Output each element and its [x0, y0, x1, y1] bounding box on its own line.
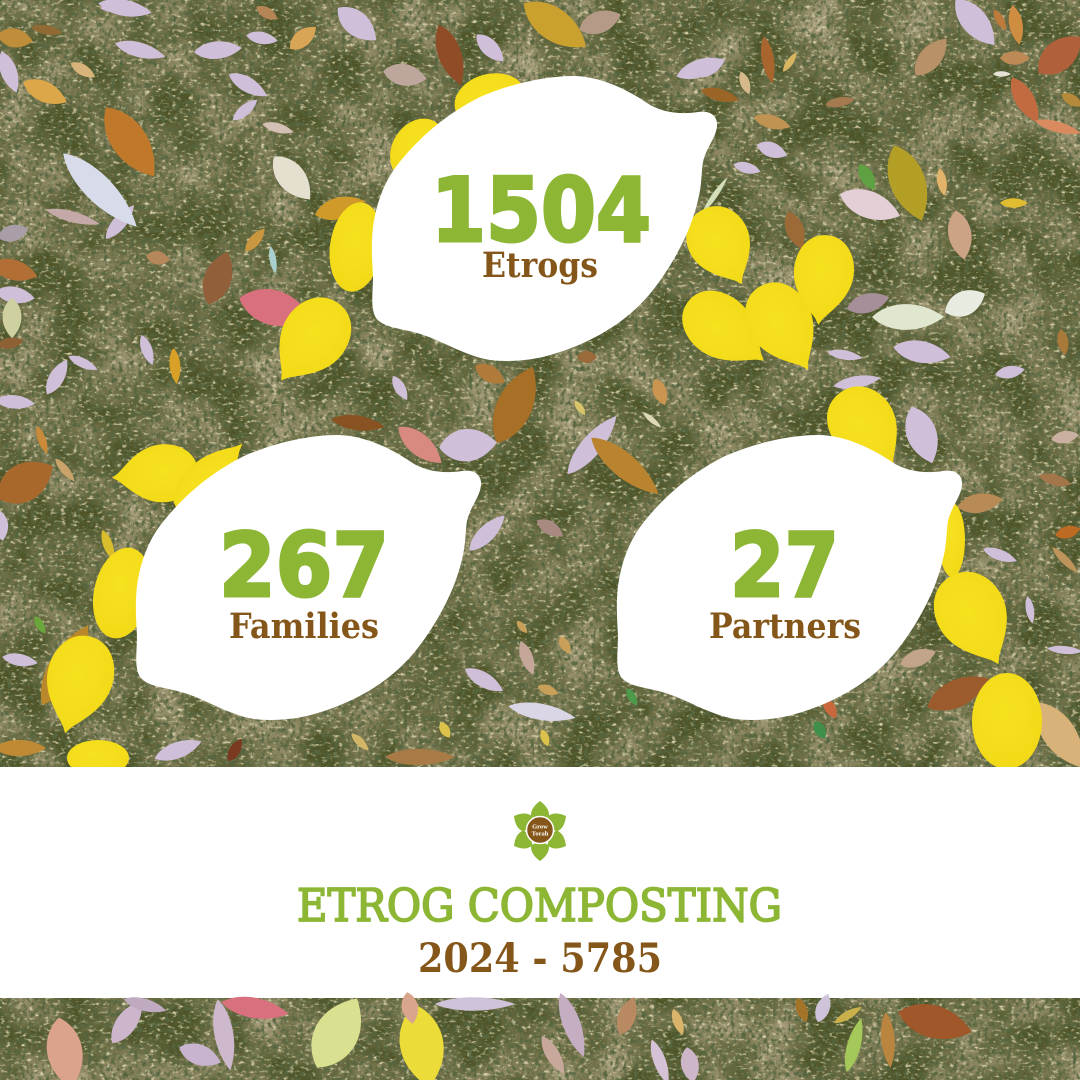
fallen leaves: orange and brown [0, 0, 1080, 777]
label: Families: Families [229, 606, 379, 647]
icon: Grow Torah flower logo: Torah [532, 830, 549, 838]
fallen leaves: bright accents [3, 71, 1028, 748]
label: Partners: Partners [709, 606, 861, 647]
fallen leaves: lavender [0, 0, 1080, 766]
white title band [0, 767, 1080, 998]
number: 27: 27 [730, 514, 839, 617]
bottom strip leaves [41, 988, 976, 1080]
icon: Grow Torah flower logo: Grow [532, 824, 548, 830]
label: Etrogs: Etrogs [482, 245, 598, 286]
lemon callout: families [136, 435, 481, 720]
title: Etrog Composting: ETROG COMPOSTING [297, 879, 782, 932]
number: 267: 267 [219, 514, 389, 617]
lemon callout: etrogs [372, 76, 717, 361]
icon: Grow Torah flower logo [510, 801, 570, 861]
etrog fruits on the grass [33, 66, 1042, 776]
number: 1504: 1504 [431, 159, 651, 262]
lemon callout: partners [617, 435, 962, 720]
subtitle: year: 2024 - 5785 [418, 935, 662, 982]
